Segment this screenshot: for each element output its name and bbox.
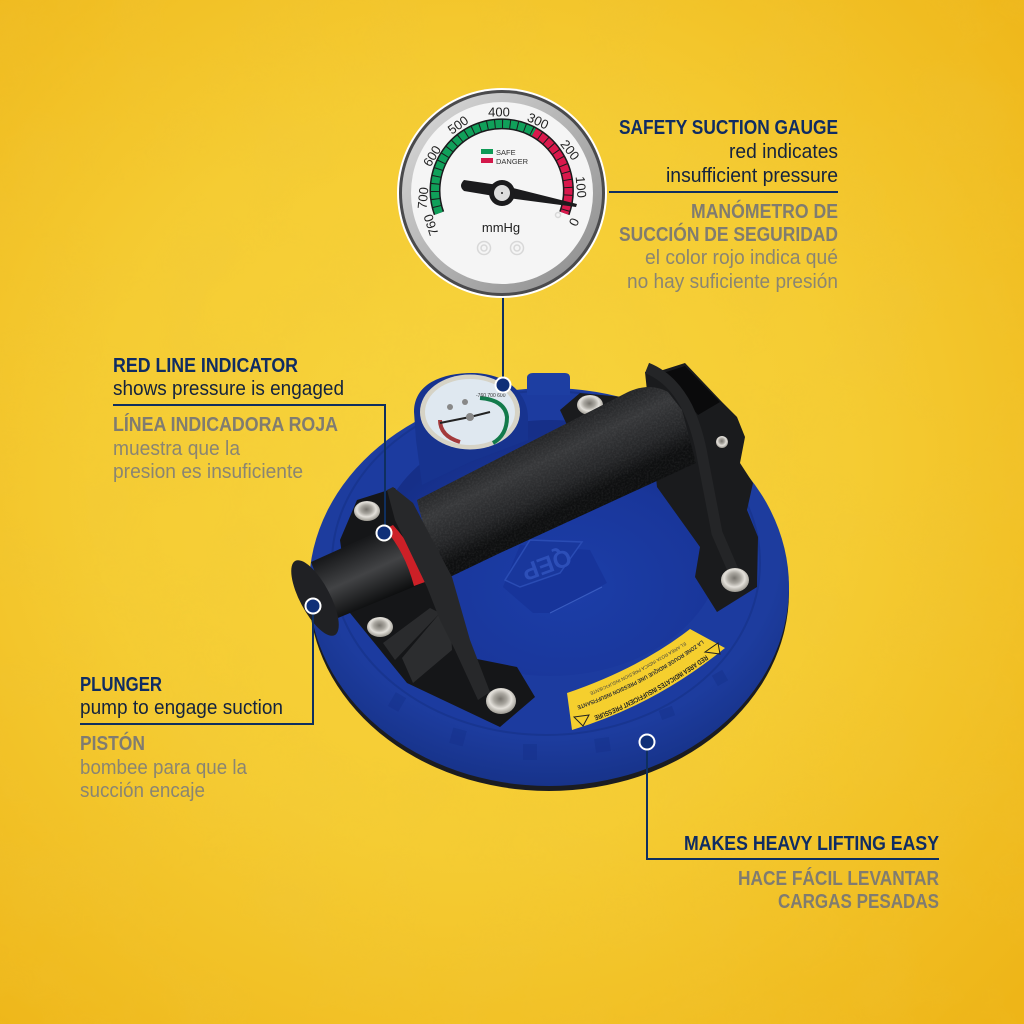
- callout: safety suction gauge: SAFETY SUCTION GAUGE: [619, 117, 838, 139]
- callout: safety suction gauge: el color rojo indica qué: [645, 247, 838, 269]
- warning label: RED AREA INDICATES INSUFFICIENT PRESSURE: [594, 655, 708, 720]
- callout: safety suction gauge: MANÓMETRO DE: [691, 199, 838, 223]
- callout: plunger: succión encaje: [80, 780, 205, 802]
- gauge unit: mmHg: [482, 220, 520, 235]
- marker dots: [306, 378, 654, 750]
- callout: makes heavy lifting easy: MAKES HEAVY LIFTING EASY: [684, 833, 940, 855]
- plunger shaft: [311, 525, 423, 620]
- callout: plunger: bombee para que la: [80, 757, 248, 779]
- gauge numbers: 500: [445, 113, 471, 137]
- callout: plunger: [80, 674, 283, 802]
- callout: red line indicator: shows pressure is engaged: [113, 378, 344, 400]
- callout: red line indicator: LÍNEA INDICADORA ROJA: [113, 413, 338, 436]
- gauge numbers: 700: [415, 187, 431, 209]
- rear strap and fasteners: [647, 368, 749, 592]
- gauge numbers: 600: [420, 143, 444, 169]
- callout: safety suction gauge: [619, 117, 838, 293]
- gauge scale: [435, 124, 568, 213]
- plunger cap: [282, 554, 348, 642]
- warning label: EL AREA ROJA INDICA PRESION INSUFICIENTE: [590, 642, 686, 695]
- gauge numbers: 0: [566, 216, 582, 228]
- safety gauge enlarged: [397, 88, 607, 298]
- rear bracket: [645, 363, 758, 612]
- gauge numbers: 400: [488, 104, 510, 120]
- front strap: [387, 487, 516, 714]
- warning label: LA ZONE ROUGE INDIQUE UNE PRESSION INSUFFISANTE: [577, 640, 704, 710]
- handle grip: [417, 387, 696, 577]
- mini gauge: [414, 373, 528, 485]
- callout: plunger: pump to engage suction: [80, 697, 283, 719]
- gauge rivets: [478, 212, 560, 254]
- gauge bezel: [397, 88, 607, 298]
- red line indicator ring: [385, 525, 425, 586]
- callout: red line indicator: [113, 355, 344, 483]
- leader lines: [80, 192, 939, 859]
- vacuum tab: [527, 373, 570, 395]
- callout: safety suction gauge: SUCCIÓN DE SEGURIDAD: [619, 222, 838, 246]
- gauge numbers: [415, 104, 589, 238]
- callout: red line indicator: muestra que la: [113, 438, 241, 460]
- gauge numbers: 760: [421, 212, 441, 238]
- callout: safety suction gauge: insufficient pressure: [666, 165, 838, 187]
- gauge numbers: 300: [525, 110, 551, 132]
- gauge legend: DANGER: [496, 157, 529, 166]
- gauge needle: [461, 180, 577, 207]
- callout: safety suction gauge: no hay suficiente presión: [627, 271, 838, 293]
- gauge legend: SAFE: [496, 148, 516, 157]
- warning label: [567, 629, 725, 730]
- logo emboss: QEP: [518, 543, 575, 585]
- callout: makes heavy lifting easy: [684, 833, 940, 913]
- front base mount: [340, 488, 535, 727]
- gauge numbers: 100: [573, 176, 589, 198]
- gauge legend: [481, 148, 529, 166]
- callout: red line indicator: presion es insuficiente: [113, 461, 303, 483]
- rim notches: [388, 670, 728, 760]
- callout: plunger: PISTÓN: [80, 731, 145, 755]
- product: suction cup: [291, 362, 789, 791]
- callout: red line indicator: RED LINE INDICATOR: [113, 355, 298, 377]
- callout: safety suction gauge: red indicates: [729, 141, 838, 163]
- mini gauge: -760 700 600: [476, 393, 506, 399]
- gauge numbers: 200: [557, 137, 583, 163]
- callout: makes heavy lifting easy: HACE FÁCIL LEVANTAR: [738, 867, 939, 890]
- suction plate: [309, 373, 789, 791]
- callout: makes heavy lifting easy: CARGAS PESADAS: [778, 891, 939, 913]
- logo emboss: [505, 540, 582, 587]
- rear screw: [560, 393, 623, 425]
- callout: plunger: PLUNGER: [80, 674, 162, 696]
